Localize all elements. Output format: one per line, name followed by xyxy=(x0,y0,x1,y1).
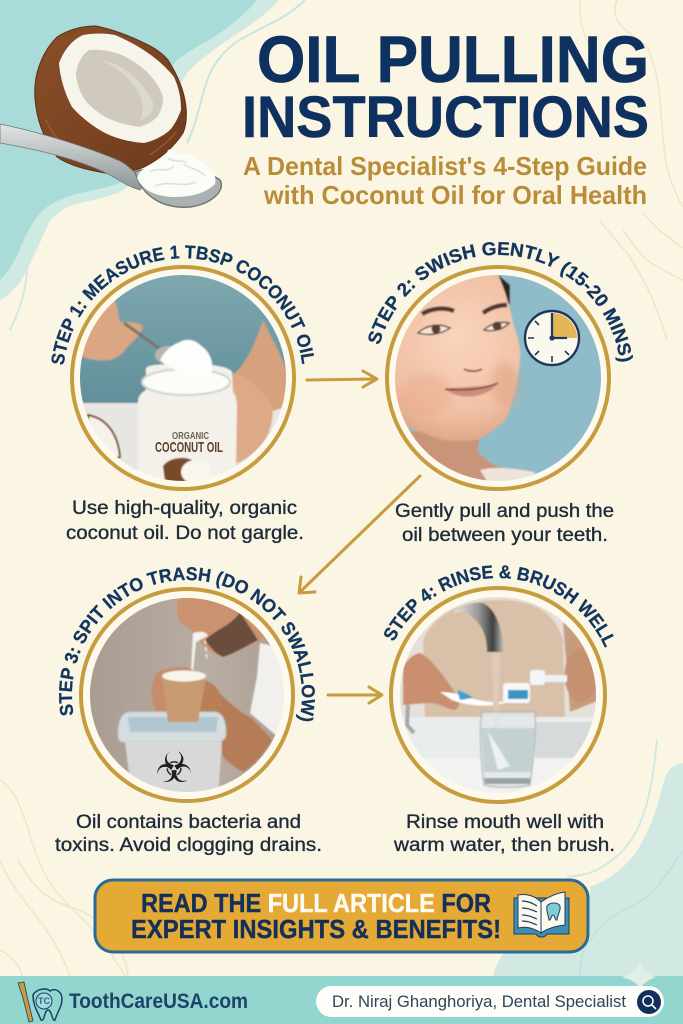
coconut shell xyxy=(35,26,186,173)
step 1 photo: scooping coconut oil from jar: COCONUT OIL xyxy=(155,439,223,456)
subtitle: with Coconut Oil for Oral Health xyxy=(263,180,647,210)
step 1 ring xyxy=(72,267,294,489)
step 1 caption: coconut oil. Do not gargle. xyxy=(66,523,304,544)
oil scoop xyxy=(137,149,215,197)
step 1 photo: scooping coconut oil from jar xyxy=(80,275,286,481)
step 3 heading: STEP 3: SPIT INTO TRASH (DO NOT SWALLOW) xyxy=(59,567,316,722)
spoon bowl xyxy=(135,168,221,207)
subtitle: A Dental Specialist's 4-Step Guide xyxy=(243,151,647,181)
arrow: step 2 to step 3 xyxy=(299,476,420,593)
website name: ToothCareUSA.com xyxy=(69,990,248,1013)
step 2 photo: smiling woman swishing xyxy=(395,275,601,481)
spoon handle xyxy=(0,124,146,190)
call to action banner xyxy=(95,880,588,952)
step 4 caption: warm water, then brush. xyxy=(393,835,615,856)
title: INSTRUCTIONS xyxy=(242,85,649,150)
panel: step 3 xyxy=(55,567,322,856)
step 3 photo: man spitting into cup over trash xyxy=(85,595,290,795)
top-left teal wave xyxy=(0,0,257,280)
jar label text: ORGANIC xyxy=(172,431,209,442)
bottom-right light teal wave xyxy=(493,763,683,976)
banner text: EXPERT INSIGHTS & BENEFITS! xyxy=(131,914,501,944)
top-left light teal wave xyxy=(0,0,279,300)
icon: biohazard symbol: ☣ xyxy=(155,743,193,792)
footer bar xyxy=(0,960,683,1024)
step 3 caption xyxy=(55,812,322,856)
step 4 ring xyxy=(391,588,605,802)
step 2 caption: Gently pull and push the xyxy=(395,501,614,522)
step 4 caption xyxy=(393,812,615,856)
step 2 caption xyxy=(395,501,614,546)
step 4 heading: STEP 4: RINSE & BRUSH WELL xyxy=(384,565,614,648)
panel: step 2 xyxy=(368,242,633,546)
coconut inner hollow xyxy=(76,50,163,127)
arrow: step 3 to step 4 xyxy=(328,687,382,703)
logo: toothbrush and tooth xyxy=(18,982,62,1022)
icon: open book with tooth xyxy=(514,892,569,937)
icon: search xyxy=(637,990,661,1014)
banner text xyxy=(131,888,501,944)
banner text: READ THE FULL ARTICLE FOR xyxy=(141,888,491,918)
sparkle accent xyxy=(621,960,656,988)
step 3 caption: Oil contains bacteria and xyxy=(76,812,301,833)
arrow: step 1 to step 2 xyxy=(307,371,377,387)
step 1 caption xyxy=(66,498,304,544)
step 4 photo: rinsing with faucet and toothbrush xyxy=(395,595,600,802)
step 2 ring xyxy=(387,267,609,489)
step 1 caption: Use high-quality, organic xyxy=(72,498,297,519)
step 2 heading: STEP 2: SWISH GENTLY (15-20 MINS) xyxy=(368,242,633,362)
title: OIL PULLING xyxy=(257,22,649,96)
panel: step 1 xyxy=(51,245,314,544)
step 1 heading: STEP 1: MEASURE 1 TBSP COCONUT OIL xyxy=(51,245,314,365)
step 3 caption: toxins. Avoid clogging drains. xyxy=(55,835,322,856)
logo: toothbrush and tooth: TC xyxy=(38,996,50,1006)
icon: clock xyxy=(525,311,579,365)
illustration: coconut half and spoon of oil xyxy=(0,26,221,207)
subtitle xyxy=(243,151,647,210)
step 2 caption: oil between your teeth. xyxy=(402,525,608,546)
author pill xyxy=(316,986,664,1017)
step 4 caption: Rinse mouth well with xyxy=(406,812,604,833)
title xyxy=(242,22,649,150)
banner background xyxy=(95,880,588,952)
panel: step 4 xyxy=(384,565,615,856)
step 3 ring xyxy=(81,589,293,801)
author pill: Dr. Niraj Ghanghoriya, Dental Specialist xyxy=(332,992,626,1011)
footer background xyxy=(0,976,683,1024)
coconut white flesh xyxy=(59,34,181,143)
